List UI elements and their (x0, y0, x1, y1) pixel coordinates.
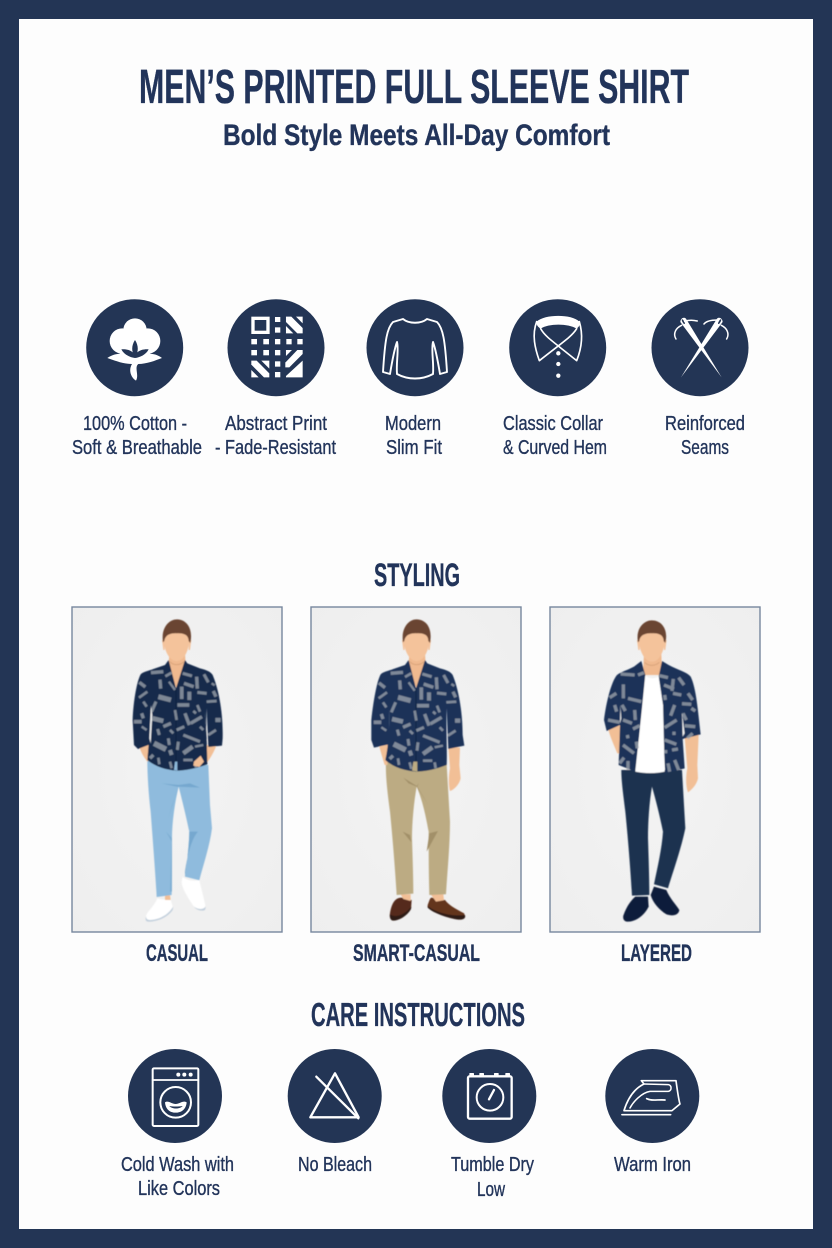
feature: seams (652, 299, 748, 459)
label: No Bleach (298, 1154, 372, 1176)
icon: crossed needles (652, 299, 748, 396)
feature: cotton (72, 299, 202, 459)
panel: casual outfit (72, 607, 282, 932)
figure: smart-casual (371, 619, 465, 921)
care: warm iron (605, 1049, 699, 1176)
label: Slim Fit (386, 437, 442, 459)
icon: classic collar (509, 299, 606, 396)
label (72, 413, 202, 459)
icon: long sleeve shirt (366, 299, 464, 396)
panel: care (121, 1049, 699, 1201)
label: Like Colors (138, 1178, 220, 1200)
label: Modern (385, 413, 441, 435)
icon: crossed triangle (288, 1049, 382, 1143)
heading: styling: STYLING (374, 557, 460, 593)
label: smart-casual: SMART-CASUAL (353, 940, 480, 967)
care: tumble dry (442, 1049, 536, 1201)
label (665, 413, 745, 459)
label (121, 1154, 234, 1200)
label: - Fade-Resistant (215, 437, 336, 459)
label: layered: LAYERED (621, 940, 692, 967)
icon: iron (605, 1049, 699, 1143)
icon: cotton boll (86, 299, 183, 396)
care: no bleach (288, 1049, 382, 1176)
subtitle: Bold Style Meets All-Day Comfort (223, 119, 610, 152)
heading: care instructions: CARE INSTRUCTIONS (311, 996, 525, 1033)
label: Cold Wash with (121, 1154, 234, 1176)
label: 100% Cotton - (83, 413, 187, 435)
feature: collar (503, 299, 607, 459)
label: casual: CASUAL (146, 940, 208, 967)
panel: smart-casual outfit (311, 607, 521, 932)
label: Tumble Dry (451, 1154, 534, 1176)
label: Abstract Print (225, 413, 327, 435)
panel: layered outfit (550, 607, 760, 932)
label (215, 413, 336, 459)
icon: dryer (442, 1049, 536, 1143)
label (385, 413, 442, 459)
label: Soft & Breathable (72, 437, 202, 459)
label (451, 1154, 534, 1201)
figure: layered (604, 620, 701, 922)
feature: slim fit (366, 299, 464, 459)
icon: print pattern (228, 299, 324, 396)
label: Seams (681, 437, 729, 459)
figure: casual (133, 619, 223, 922)
care: cold wash (121, 1049, 234, 1200)
label (503, 413, 607, 459)
label: & Curved Hem (503, 437, 607, 459)
label: Warm Iron (614, 1154, 691, 1176)
label: Reinforced (665, 413, 745, 435)
icon: washing machine (128, 1049, 222, 1143)
label: Low (477, 1179, 505, 1201)
label: Classic Collar (503, 413, 603, 435)
feature: abstract print (215, 299, 336, 459)
panel: features (72, 299, 748, 459)
